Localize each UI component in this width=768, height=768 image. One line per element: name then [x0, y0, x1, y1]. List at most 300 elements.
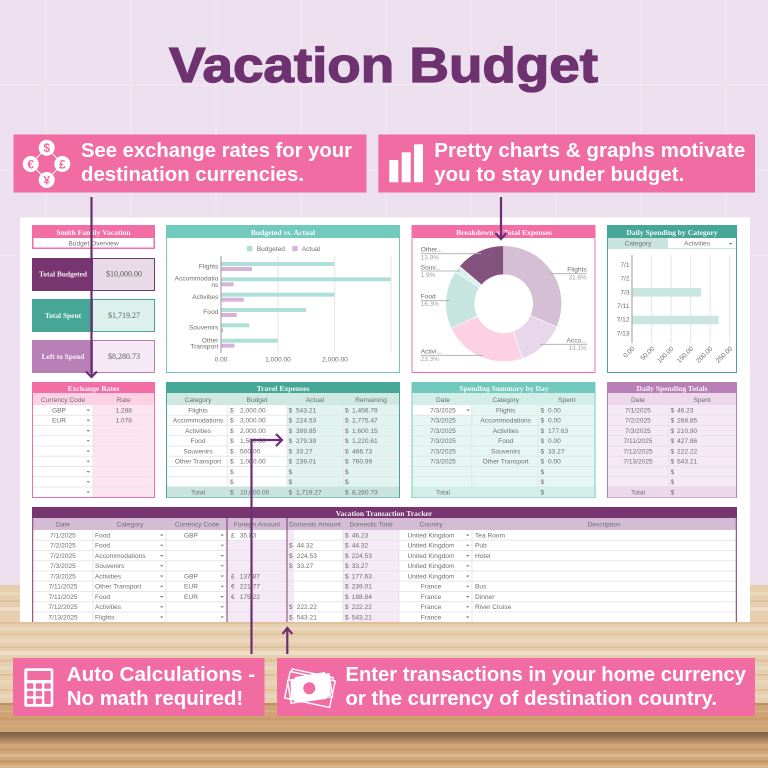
- panel: travel expenses table: $: [230, 469, 234, 476]
- tracker categories, amounts and descriptions: 137.87: [240, 573, 260, 580]
- panel: budget overview header: Smith Family Vacation: [56, 228, 131, 237]
- arrow: charts: [496, 197, 506, 239]
- value axis labels: 1,000.00: [265, 356, 291, 363]
- panel: daily spending by category chart: [607, 225, 737, 372]
- tracker dates and currencies: United Kingdom: [408, 573, 455, 580]
- tracker dates and currencies: 7/2/2025: [50, 553, 76, 560]
- tracker dates and currencies: United Kingdom: [408, 542, 455, 550]
- panel: spending summary by day table: Accommodations: [480, 418, 532, 425]
- panel: spending summary by day table: Category: [492, 397, 520, 404]
- tracker categories, amounts and descriptions: Activities: [95, 573, 122, 580]
- tracker categories, amounts and descriptions: 44.32: [297, 542, 314, 550]
- tracker dates and currencies: GBP: [184, 532, 199, 539]
- donut slices: [446, 246, 562, 362]
- category labels: Flights: [199, 263, 219, 270]
- tracker categories, amounts and descriptions: Souvenirs: [95, 563, 125, 570]
- panel: travel expenses table: $: [288, 408, 292, 414]
- panel: travel expenses table: 1,719.27: [296, 490, 322, 496]
- tracker categories, amounts and descriptions: £: [231, 532, 235, 539]
- panel: daily spending totals table: 7/3/2025: [625, 428, 651, 435]
- donut labels: 13.1%: [569, 345, 587, 352]
- tracker categories, amounts and descriptions: $: [345, 573, 349, 580]
- tracker categories, amounts and descriptions: $: [289, 542, 293, 550]
- tracker categories, amounts and descriptions: 543.21: [297, 614, 317, 621]
- tracker dates and currencies: 7/11/2025: [49, 594, 78, 601]
- tracker categories, amounts and descriptions: 33.27: [352, 563, 369, 570]
- rotated value labels: 0.00: [622, 345, 637, 359]
- panel: daily spending totals table: 7/1/2025: [625, 408, 651, 414]
- tracker column headings: Domestic Amount: [289, 522, 341, 529]
- icon: currency exchange: £: [59, 157, 66, 171]
- chart legend: [247, 246, 321, 253]
- tracker categories, amounts and descriptions: 239.01: [352, 584, 372, 590]
- panel: total budgeted: Total Budgeted: [39, 270, 88, 278]
- panel: budgeted vs actual chart: [166, 225, 400, 372]
- tracker column headings: Foreign Amount: [234, 522, 280, 529]
- tracker column headings: Description: [588, 522, 621, 529]
- callout text: [434, 139, 745, 186]
- panel: daily spending totals table: 7/12/2025: [623, 448, 653, 456]
- panel: spending summary by day table: Total: [436, 490, 450, 496]
- rotated value labels: [622, 345, 734, 365]
- panel: daily spending totals table: $: [670, 490, 674, 496]
- panel: spending summary by day table: Flights: [496, 408, 516, 414]
- panel: spending summary by day table: Food: [498, 438, 514, 445]
- panel: travel expenses table: $: [288, 459, 292, 466]
- category labels: Transport: [190, 344, 218, 350]
- panel: daily spending totals table: 46.23: [677, 408, 694, 414]
- panel: spending summary by day table: 0.00: [548, 459, 561, 466]
- panel: daily spending totals table: $: [670, 448, 674, 456]
- panel: travel expenses table: 10,000.00: [240, 490, 270, 496]
- tracker categories, amounts and descriptions: Bus: [475, 584, 487, 590]
- date labels: 7/2: [620, 276, 630, 283]
- panel: daily spending totals table: 210.90: [677, 428, 698, 435]
- tracker categories, amounts and descriptions: Tea Room: [475, 532, 506, 539]
- panel: travel expenses table: $: [230, 428, 234, 435]
- panel: travel expenses table: $: [230, 490, 234, 496]
- panel: travel expenses table: $: [345, 490, 349, 496]
- callout text: [346, 663, 747, 710]
- tracker categories, amounts and descriptions: 224.53: [352, 553, 372, 560]
- icon: banknotes: [285, 669, 335, 707]
- category labels: ns: [211, 282, 219, 289]
- callout text: See exchange rates for your: [81, 139, 352, 162]
- panel: travel expenses table: 2,000.00: [240, 408, 266, 414]
- panel: travel expenses table: Food: [190, 438, 206, 445]
- tracker categories, amounts and descriptions: 175.22: [240, 594, 260, 601]
- tracker categories, amounts and descriptions: 33.27: [297, 563, 314, 570]
- panel: travel expenses table: $: [345, 459, 349, 466]
- tracker categories, amounts and descriptions: 35.83: [240, 532, 257, 539]
- category labels: Activities: [192, 294, 219, 301]
- panel: travel expenses table: 1,456.79: [352, 408, 378, 414]
- panel: spending summary by day table: Date: [436, 397, 450, 404]
- tracker categories, amounts and descriptions: 188.84: [352, 594, 372, 601]
- panel: spending summary by day table: [412, 382, 596, 498]
- panel: travel expenses table: Other Transport: [175, 459, 221, 466]
- panel: vacation transaction tracker: [32, 507, 737, 622]
- panel: travel expenses table: $: [288, 448, 292, 456]
- panel: exchange rates table: 1.078: [115, 418, 132, 425]
- panel: travel expenses table: $: [345, 438, 349, 445]
- tracker categories, amounts and descriptions: €: [231, 594, 235, 601]
- tracker dates and currencies: EUR: [184, 584, 198, 590]
- panel: exchange rates table: Currency Code: [41, 397, 86, 404]
- panel: travel expenses table: $: [345, 418, 349, 425]
- tracker categories, amounts and descriptions: $: [345, 614, 349, 621]
- donut labels: Acco...: [567, 337, 587, 344]
- panel: spending summary by day table: 7/3/2025: [430, 418, 456, 425]
- panel: total budgeted: $10,000.00: [106, 270, 142, 278]
- tracker column headings: [56, 522, 621, 529]
- tracker dates and currencies: 7/3/2025: [50, 563, 76, 570]
- tracker categories, amounts and descriptions: Dinner: [475, 594, 495, 601]
- date labels: 7/3: [620, 289, 630, 296]
- rotated value labels: 100.00: [656, 345, 676, 365]
- panel: daily spending totals table: 427.86: [677, 438, 698, 445]
- panel: travel expenses table: Total: [191, 490, 205, 496]
- tracker categories, amounts and descriptions: $: [345, 532, 349, 539]
- panel: travel expenses table: Accommodations: [173, 418, 224, 425]
- panel: travel expenses table: $: [288, 479, 292, 486]
- panel: travel expenses table: 224.53: [296, 418, 317, 425]
- panel: spending summary by day table: 7/3/2025: [430, 438, 456, 445]
- tracker categories, amounts and descriptions: 177.63: [352, 573, 372, 580]
- panel: daily spending totals table: $: [670, 438, 674, 445]
- panel: daily spending totals table: $: [670, 428, 674, 435]
- panel: travel expenses table: $: [288, 469, 292, 476]
- panel: daily spending totals table: 7/11/2025: [624, 438, 653, 445]
- budget bars: [221, 262, 391, 343]
- tracker categories, amounts and descriptions: $: [345, 563, 349, 570]
- date labels: 7/13: [617, 331, 630, 338]
- tracker categories, amounts and descriptions: Pub: [475, 542, 487, 550]
- category labels: Accommodatio: [175, 276, 219, 283]
- tracker categories, amounts and descriptions: €: [231, 584, 235, 590]
- donut labels: Flights: [567, 267, 587, 274]
- tracker column headings: Date: [56, 522, 70, 529]
- panel: exchange rates table: Exchange Rates: [68, 384, 119, 393]
- tracker categories, amounts and descriptions: 222.22: [352, 604, 372, 611]
- tracker categories, amounts and descriptions: $: [289, 553, 293, 560]
- tracker categories, amounts and descriptions: Activities: [95, 604, 122, 611]
- tracker categories, amounts and descriptions: 44.32: [352, 542, 369, 550]
- panel: spending summary by day table: $: [540, 428, 544, 435]
- chart legend: Budgeted: [257, 246, 285, 253]
- panel: daily spending totals table: Total: [631, 490, 645, 496]
- panel: travel expenses table: Souvenirs: [183, 448, 213, 456]
- panel: travel expenses table: 466.73: [352, 448, 373, 456]
- panel: spending summary by day table: 7/3/2025: [430, 408, 456, 414]
- donut labels: 1.9%: [421, 272, 436, 279]
- panel: travel expenses table: $: [345, 428, 349, 435]
- panel: travel expenses table: 33.27: [296, 448, 313, 456]
- callout: exchange rates: [14, 134, 366, 192]
- tracker dates and currencies: 7/12/2025: [48, 604, 78, 611]
- panel: spending summary by day table: $: [540, 448, 544, 456]
- panel: breakdown donut chart: Breakdown of Total Expenses: [456, 228, 552, 237]
- tracker categories, amounts and descriptions: Accommodations: [95, 553, 146, 560]
- panel: travel expenses table: $: [230, 459, 234, 466]
- date labels: 7/12: [617, 317, 630, 324]
- panel: travel expenses table: 1,220.61: [352, 438, 378, 445]
- panel: daily spending totals table: $: [670, 418, 674, 425]
- tracker categories, amounts and descriptions: $: [345, 553, 349, 560]
- panel: breakdown donut chart: [412, 225, 596, 372]
- panel: travel expenses table: Travel Expenses: [257, 384, 309, 393]
- panel: spending summary by day table: Other Transport: [483, 459, 529, 466]
- panel: travel expenses table: 399.85: [296, 428, 317, 435]
- panel: spending summary by day table: $: [540, 459, 544, 466]
- tracker column headings: Currency Code: [175, 522, 220, 529]
- panel: travel expenses table: 239.01: [296, 459, 317, 466]
- tracker dates and currencies: 7/1/2025: [50, 532, 76, 539]
- callout text: Enter transactions in your home currency: [346, 663, 747, 686]
- callout text: No math required!: [67, 687, 243, 710]
- tracker dates and currencies: [48, 532, 455, 621]
- donut labels: Food: [421, 293, 436, 300]
- panel: travel expenses table: $: [230, 438, 234, 445]
- category labels: Food: [203, 309, 219, 316]
- panel: travel expenses table: $: [345, 448, 349, 456]
- rotated value labels: 250.00: [715, 345, 734, 365]
- rotated value labels: 200.00: [695, 345, 715, 365]
- arrow: enter transactions: [282, 628, 292, 654]
- callout text: Pretty charts & graphs motivate: [434, 139, 745, 162]
- tracker categories, amounts and descriptions: $: [345, 542, 349, 550]
- panel: left to spend: [32, 340, 154, 373]
- panel: daily spending by category chart: Category: [625, 240, 652, 248]
- callout text: [81, 139, 352, 186]
- tracker dates and currencies: France: [421, 584, 442, 590]
- tracker categories, amounts and descriptions: £: [231, 573, 235, 580]
- panel: daily spending totals table: Date: [631, 397, 645, 404]
- tracker column headings: Country: [419, 522, 443, 529]
- value axis labels: 0.00: [215, 356, 228, 363]
- title: Vacation Budget: [169, 39, 598, 93]
- tracker dates and currencies: 7/3/2025: [50, 573, 76, 580]
- daily bars: [632, 288, 719, 324]
- tracker categories, amounts and descriptions: 222.22: [297, 604, 317, 611]
- donut labels: Activi...: [421, 348, 442, 355]
- panel: travel expenses table: 500.00: [240, 448, 261, 456]
- date labels: 7/11: [617, 303, 630, 310]
- donut labels: [421, 247, 587, 363]
- panel: travel expenses table: $: [230, 479, 234, 486]
- tracker dates and currencies: United Kingdom: [408, 553, 455, 560]
- callout text: [67, 663, 255, 710]
- panel: daily spending totals table: 7/13/2025: [623, 459, 653, 466]
- donut labels: Other...: [421, 247, 442, 254]
- panel: spending summary by day table: 33.27: [548, 448, 565, 456]
- tracker categories, amounts and descriptions: 543.21: [352, 614, 372, 621]
- panel: daily spending totals table: Daily Spending Totals: [637, 384, 707, 393]
- tracker dates and currencies: 7/11/2025: [49, 584, 78, 590]
- panel: spending summary by day table: 0.00: [548, 438, 561, 445]
- panel: daily spending totals table: 268.85: [677, 418, 698, 425]
- panel: travel expenses table: 1,600.15: [352, 428, 378, 435]
- panel: daily spending totals table: $: [670, 479, 674, 486]
- icon: currency exchange: $: [43, 141, 50, 155]
- panel: travel expenses table: Activities: [185, 428, 212, 435]
- donut labels: Souv...: [421, 264, 441, 271]
- tracker categories, amounts and descriptions: [95, 532, 512, 621]
- tracker categories, amounts and descriptions: $: [289, 614, 293, 621]
- panel: daily spending totals table: 7/2/2025: [625, 418, 651, 425]
- tracker categories, amounts and descriptions: 46.23: [352, 532, 369, 539]
- tracker categories, amounts and descriptions: Food: [95, 594, 110, 601]
- tracker categories, amounts and descriptions: $: [345, 594, 349, 601]
- panel: daily spending totals table: 543.21: [677, 459, 698, 466]
- tracker dates and currencies: United Kingdom: [408, 563, 455, 570]
- tracker dates and currencies: 7/13/2025: [48, 614, 78, 621]
- icon: currency exchange: [23, 140, 70, 188]
- rotated value labels: 150.00: [676, 345, 695, 365]
- panel: spending summary by day table: Spending Summary by Day: [459, 384, 549, 393]
- panel: spending summary by day table: $: [540, 418, 544, 425]
- donut labels: 31.6%: [569, 274, 587, 281]
- panel: travel expenses table: 760.99: [352, 459, 373, 466]
- tracker dates and currencies: France: [421, 604, 442, 611]
- spreadsheet sheet: [20, 218, 750, 622]
- panel: daily spending totals table: [607, 382, 737, 498]
- panel: travel expenses table: $: [345, 408, 349, 414]
- panel: vacation transaction tracker: Vacation Transaction Tracker: [336, 509, 433, 518]
- tracker column headings: Category: [117, 522, 144, 529]
- tracker dates and currencies: GBP: [184, 573, 199, 580]
- panel: exchange rates table: 1.288: [115, 408, 132, 414]
- tracker categories, amounts and descriptions: River Cruise: [475, 604, 512, 611]
- tracker column headings: Domestic Total: [349, 522, 393, 529]
- panel: travel expenses table: 2,775.47: [352, 418, 378, 425]
- value axis labels: 2,000.00: [322, 356, 348, 363]
- arrow: exchange rates: [86, 197, 97, 377]
- panel: travel expenses table: $: [230, 448, 234, 456]
- panel: travel expenses table: $: [288, 438, 292, 445]
- donut labels: 23.3%: [421, 356, 439, 363]
- panel: spending summary by day table: $: [540, 479, 544, 486]
- panel: travel expenses table: Flights: [188, 408, 208, 414]
- panel: daily spending totals table: $: [670, 469, 674, 476]
- panel: exchange rates table: EUR: [52, 418, 66, 425]
- date labels: 7/1: [620, 262, 630, 269]
- panel: spending summary by day table: 7/3/2025: [430, 448, 456, 456]
- panel: daily spending totals table: 222.22: [677, 448, 698, 456]
- tracker categories, amounts and descriptions: Flights: [95, 614, 115, 621]
- date labels: [617, 262, 630, 338]
- panel: daily spending totals table: $: [670, 408, 674, 414]
- callout text: Auto Calculations -: [67, 663, 255, 686]
- panel: travel expenses table: 2,000.00: [240, 428, 266, 435]
- panel: total budgeted: [32, 258, 154, 291]
- arrow: auto calculations: [252, 434, 282, 654]
- tracker dates and currencies: France: [421, 614, 442, 621]
- panel: spending summary by day table: $: [540, 469, 544, 476]
- value axis labels: [215, 356, 348, 363]
- panel: spending summary by day table: 177.63: [548, 428, 569, 435]
- panel: left to spend: $8,280.73: [108, 352, 140, 361]
- panel: travel expenses table: $: [230, 408, 234, 414]
- panel: travel expenses table: 1,500.00: [240, 438, 266, 445]
- panel: travel expenses table: $: [230, 418, 234, 425]
- category labels: [175, 263, 219, 350]
- tracker categories, amounts and descriptions: $: [345, 584, 349, 590]
- panel: travel expenses table: 8,280.73: [352, 490, 378, 496]
- tracker categories, amounts and descriptions: Hotel: [475, 553, 491, 560]
- callout: charts: [378, 134, 755, 192]
- panel: spending summary by day table: 7/3/2025: [430, 428, 456, 435]
- panel: daily spending totals table: $: [670, 459, 674, 466]
- panel: spending summary by day table: 0.00: [548, 418, 561, 425]
- panel: left to spend: Left to Spend: [42, 352, 85, 361]
- panel: travel expenses table: $: [345, 469, 349, 476]
- panel: spending summary by day table: 0.00: [548, 408, 561, 414]
- rotated value labels: 50.00: [639, 345, 656, 362]
- panel: travel expenses table: Category: [185, 397, 212, 404]
- tracker categories, amounts and descriptions: Other Transport: [95, 584, 141, 590]
- callout text: or the currency of destination country.: [346, 687, 717, 710]
- tracker dates and currencies: United Kingdom: [408, 532, 455, 539]
- tracker categories, amounts and descriptions: 224.53: [297, 553, 317, 560]
- tracker dates and currencies: EUR: [184, 594, 198, 601]
- panel: spending summary by day table: 7/3/2025: [430, 459, 456, 466]
- panel: budgeted vs actual chart: Budgeted vs. Actual: [251, 228, 315, 237]
- panel: travel expenses table: $: [288, 418, 292, 425]
- panel: total spent: $1,719.27: [108, 311, 140, 320]
- panel: exchange rates table: GBP: [52, 408, 67, 414]
- icon: calculator: [24, 668, 53, 707]
- panel: spending summary by day table: Activities: [493, 428, 519, 435]
- tracker categories, amounts and descriptions: $: [345, 604, 349, 611]
- panel: travel expenses table: Budget: [247, 397, 268, 404]
- panel: travel expenses table: Remaining: [355, 397, 387, 404]
- actual bars: [221, 267, 252, 348]
- panel: travel expenses table: $: [345, 479, 349, 486]
- donut labels: 16.3%: [421, 301, 439, 308]
- callout: enter transactions: [277, 658, 755, 716]
- panel: travel expenses table: 3,000.00: [240, 418, 266, 425]
- panel: spending summary by day table: Souvenirs: [491, 448, 521, 456]
- panel: travel expenses table: $: [288, 490, 292, 496]
- panel: spending summary by day table: $: [540, 490, 544, 496]
- panel: travel expenses table: [166, 382, 400, 498]
- tracker categories, amounts and descriptions: Food: [95, 532, 110, 539]
- category labels: Souvenirs: [189, 324, 219, 331]
- panel: daily spending by category chart: Activities: [684, 240, 711, 248]
- callout: auto calculations: [13, 658, 264, 716]
- callout text: destination currencies.: [81, 163, 304, 186]
- panel: travel expenses table: 1,000.00: [240, 459, 266, 466]
- wooden shelf: [0, 585, 768, 768]
- panel: budget overview header: [32, 225, 155, 249]
- tracker dates and currencies: 7/2/2025: [50, 542, 76, 550]
- icon: bar chart: [389, 144, 423, 182]
- icon: currency exchange: €: [27, 157, 34, 171]
- panel: travel expenses table: 543.21: [296, 408, 317, 414]
- tracker categories, amounts and descriptions: $: [289, 563, 293, 570]
- tracker categories, amounts and descriptions: $: [289, 604, 293, 611]
- donut labels: 13.9%: [421, 254, 439, 261]
- panel: spending summary by day table: $: [540, 438, 544, 445]
- category labels: Other: [202, 337, 219, 344]
- panel: total spent: Total Spent: [45, 311, 82, 320]
- panel: total spent: [32, 299, 154, 332]
- icon: currency exchange: ¥: [43, 173, 50, 187]
- panel: exchange rates table: Rate: [117, 397, 131, 404]
- panel: exchange rates table: [32, 382, 155, 498]
- panel: travel expenses table: 279.39: [296, 438, 317, 445]
